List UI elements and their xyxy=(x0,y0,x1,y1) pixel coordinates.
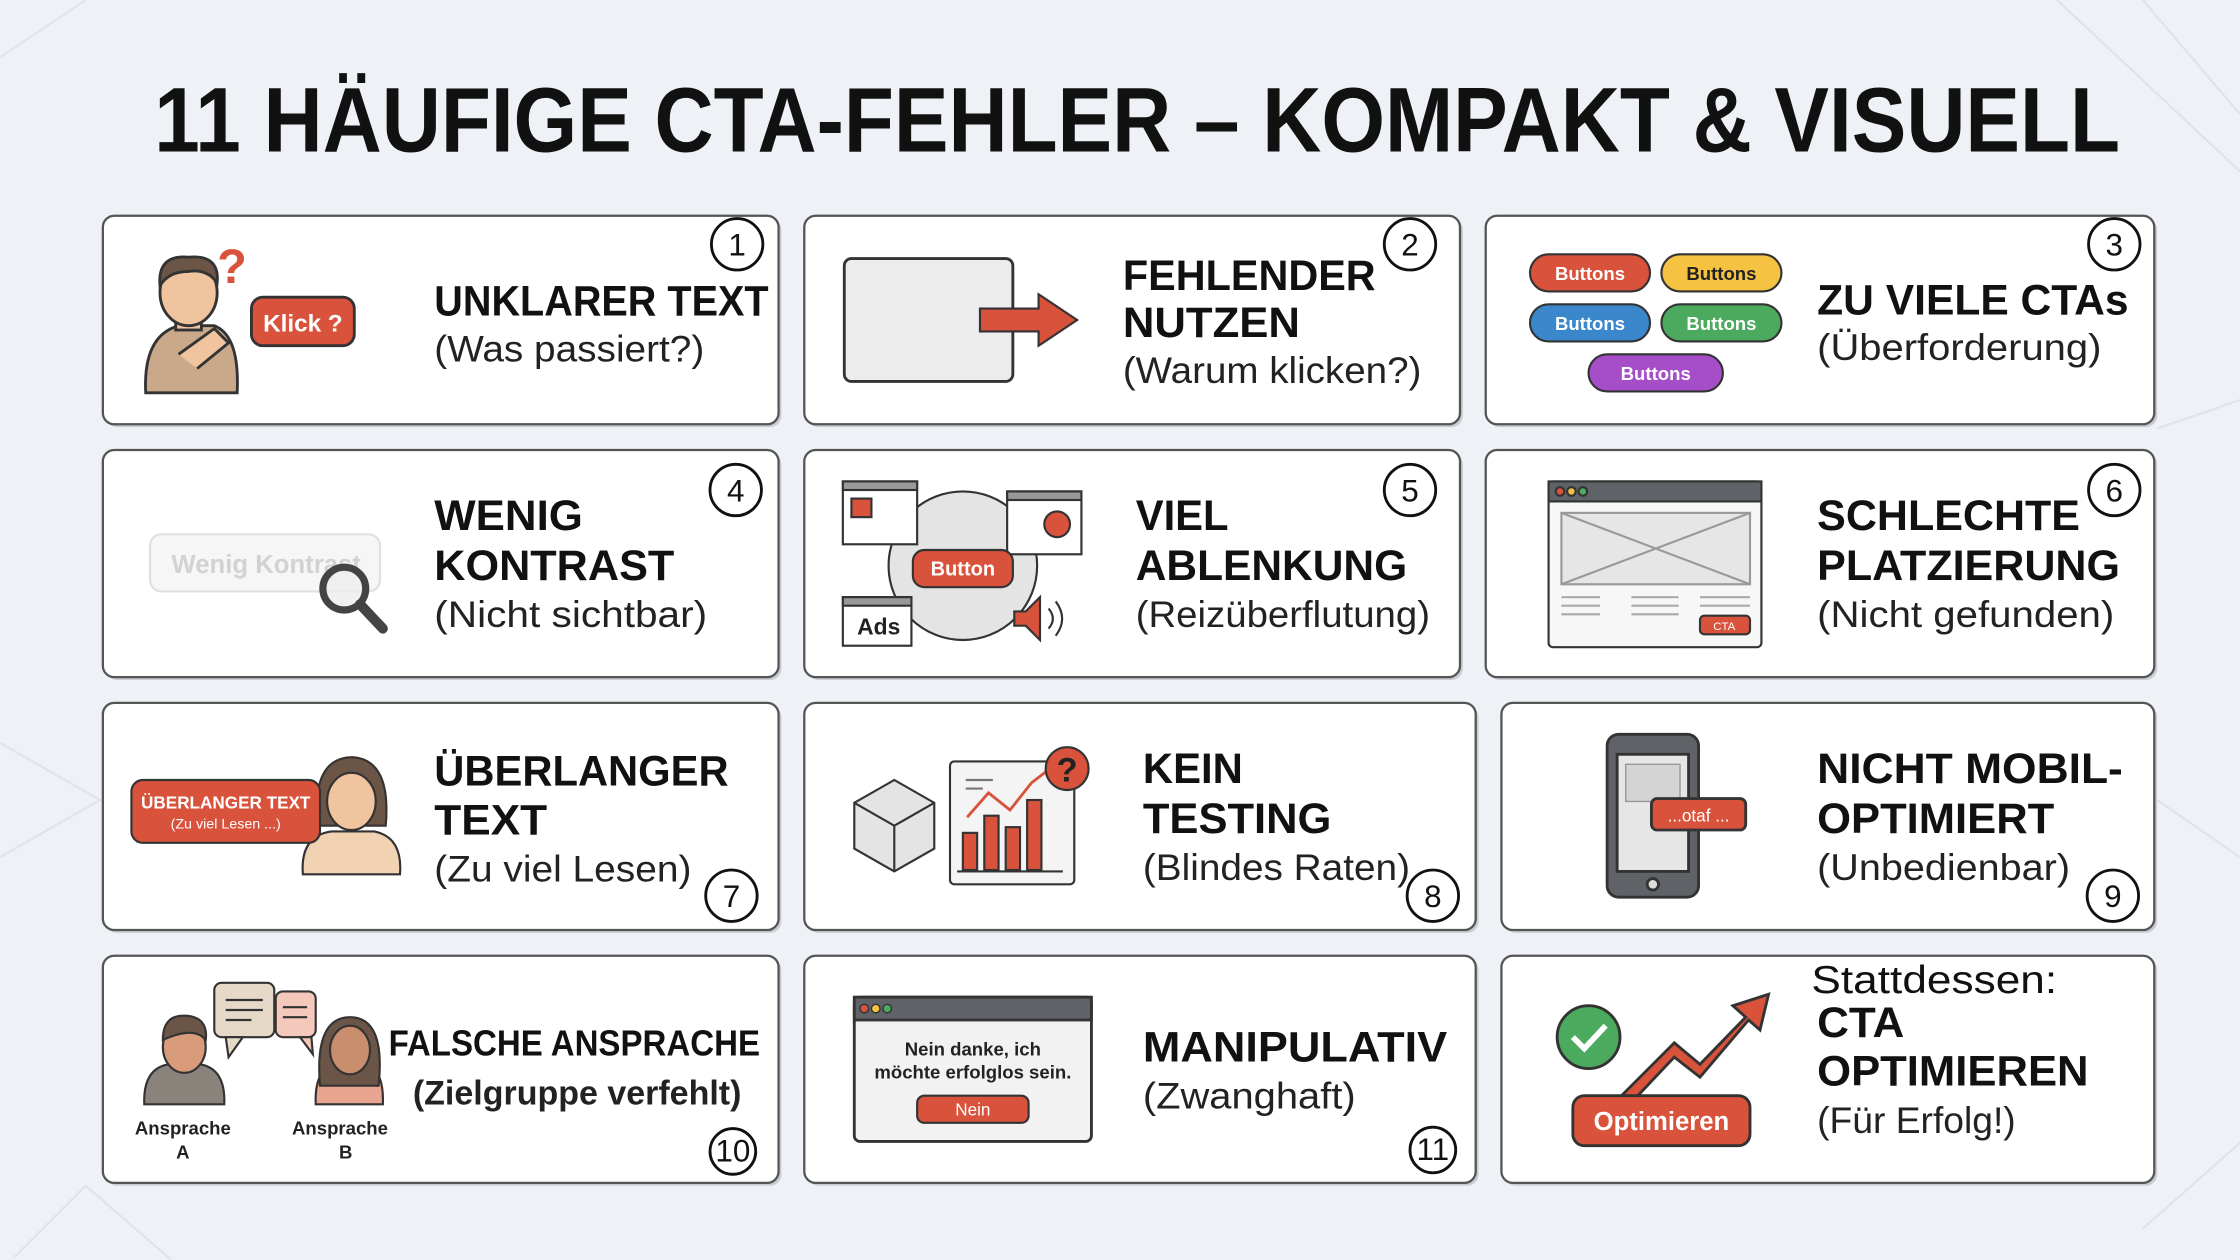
card 2: fehlender nutzen xyxy=(804,216,1463,427)
icon: phone xyxy=(1607,734,1746,897)
subtext: (Zielgruppe verfehlt) xyxy=(413,1074,741,1112)
card 7: ueberlanger text xyxy=(103,703,781,933)
heading: VIEL xyxy=(1136,492,1229,540)
icon: confused person: ? xyxy=(217,240,247,294)
number 5 xyxy=(1384,464,1436,516)
number 8 xyxy=(1407,870,1459,921)
icon: confirmshaming dialog: Nein danke, ich xyxy=(905,1039,1041,1060)
card 2: fehlender nutzen: NUTZEN xyxy=(1123,299,1300,347)
icon: long button and woman: ÜBERLANGER TEXT xyxy=(141,793,311,813)
number 11 xyxy=(1410,1127,1456,1173)
card 8: kein testing: TESTING xyxy=(1143,795,1331,843)
icon: confirmshaming dialog: möchte erfolglos sein. xyxy=(874,1062,1071,1083)
icon: distractions: Button xyxy=(931,559,995,581)
subtext: (Zwanghaft) xyxy=(1143,1075,1356,1117)
card 4: wenig kontrast: KONTRAST xyxy=(434,542,674,590)
card 7: ueberlanger text: TEXT xyxy=(434,796,547,844)
icon: dice and chart xyxy=(854,747,1089,884)
card 4: wenig kontrast xyxy=(103,450,781,680)
icon: faint button with magnifier: Wenig Kontrast xyxy=(171,551,361,579)
number 6 xyxy=(2089,464,2140,516)
icon: phone: ...otaf ... xyxy=(1668,805,1730,825)
number 2: 2 xyxy=(1401,228,1419,263)
icon: wireframe page xyxy=(1549,481,1761,647)
number 2 xyxy=(1384,219,1436,270)
heading: MANIPULATIV xyxy=(1143,1023,1448,1071)
number 6: 6 xyxy=(2106,473,2123,508)
subtext: (Blindes Raten) xyxy=(1143,846,1410,888)
icon: check, arrow, button: Optimieren xyxy=(1594,1108,1729,1136)
card 6: schlechte platzierung xyxy=(1486,450,2157,680)
icon: box with arrow xyxy=(844,259,1077,381)
icon: buttons: Buttons xyxy=(1686,313,1756,334)
icon: long button and woman: (Zu viel Lesen ...) xyxy=(171,817,281,833)
icon: check, arrow, button xyxy=(1557,994,1769,1146)
heading: UNKLARER TEXT xyxy=(434,278,769,326)
card 12: cta optimieren xyxy=(1501,956,2157,1186)
card 12: cta optimieren: OPTIMIEREN xyxy=(1817,1048,2089,1096)
subtext: (Für Erfolg!) xyxy=(1817,1099,2016,1141)
icon: dice and chart: ? xyxy=(1057,751,1078,789)
heading: CTA xyxy=(1817,999,1904,1047)
subtext: (Zu viel Lesen) xyxy=(434,847,691,889)
labels: ansprache a b: Ansprache xyxy=(292,1117,388,1138)
card 3: zu viele ctas xyxy=(1486,216,2157,427)
subtext: (Warum klicken?) xyxy=(1123,349,1421,391)
card 1: unklarer text xyxy=(103,216,781,427)
number 3 xyxy=(2089,219,2140,270)
number 1 xyxy=(711,219,763,270)
heading: SCHLECHTE xyxy=(1817,492,2080,540)
labels: ansprache a b: A xyxy=(176,1142,190,1163)
number 9: 9 xyxy=(2104,879,2122,914)
number 7: 7 xyxy=(723,879,740,914)
heading: NICHT MOBIL- xyxy=(1817,745,2123,793)
subtext: (Reizüberflutung) xyxy=(1136,593,1430,635)
number 8: 8 xyxy=(1424,879,1442,914)
card 5: viel ablenkung xyxy=(804,450,1463,680)
icon: buttons xyxy=(1530,254,1781,391)
icon: confused person xyxy=(146,240,247,393)
number 3: 3 xyxy=(2106,228,2123,263)
heading: FALSCHE ANSPRACHE xyxy=(389,1024,760,1064)
labels: ansprache a b xyxy=(135,1117,388,1163)
text: stattdessen: Stattdessen: xyxy=(1811,959,2057,1002)
card 10: falsche ansprache xyxy=(103,956,781,1186)
number 11: 11 xyxy=(1417,1132,1449,1167)
card 6: schlechte platzierung: PLATZIERUNG xyxy=(1817,542,2120,590)
subtext: (Überforderung) xyxy=(1817,326,2101,368)
heading: WENIG xyxy=(434,492,583,540)
heading: ÜBERLANGER xyxy=(434,748,729,796)
number 1: 1 xyxy=(728,228,746,263)
labels: ansprache a b: Ansprache xyxy=(135,1117,231,1138)
icon: distractions xyxy=(843,481,1081,646)
number 10 xyxy=(710,1129,756,1174)
number 7 xyxy=(706,870,757,921)
icon: confirmshaming dialog xyxy=(854,997,1091,1141)
icon: faint button with magnifier xyxy=(150,534,383,629)
subtext: (Nicht gefunden) xyxy=(1817,593,2114,635)
heading: ZU VIELE CTAs xyxy=(1817,276,2129,324)
card 11: manipulativ xyxy=(804,956,1479,1186)
icon: buttons: Buttons xyxy=(1686,263,1756,284)
icon: buttons: Buttons xyxy=(1555,313,1625,334)
card 9: nicht mobil-optimiert: OPTIMIERT xyxy=(1817,795,2054,843)
card 8: kein testing xyxy=(804,703,1479,933)
icon: buttons: Buttons xyxy=(1555,263,1625,284)
subtext: (Was passiert?) xyxy=(434,327,704,369)
card 9: nicht mobil-optimiert xyxy=(1501,703,2157,933)
icon: two people with speech bubbles xyxy=(144,983,383,1104)
number 9 xyxy=(2087,870,2139,921)
number 5: 5 xyxy=(1401,473,1419,508)
card 5: viel ablenkung: ABLENKUNG xyxy=(1136,542,1407,590)
icon: long button and woman xyxy=(131,757,400,874)
icon: distractions: Ads xyxy=(857,613,900,639)
button: klick xyxy=(251,297,354,346)
subtext: (Nicht sichtbar) xyxy=(434,593,707,635)
labels: ansprache a b: B xyxy=(339,1142,352,1163)
number 4: 4 xyxy=(727,473,744,508)
heading: FEHLENDER xyxy=(1123,252,1376,300)
number 4 xyxy=(710,464,761,516)
subtext: (Unbedienbar) xyxy=(1817,846,2070,888)
heading: KEIN xyxy=(1143,745,1243,793)
icon: confirmshaming dialog: Nein xyxy=(955,1100,990,1120)
icon: wireframe page: CTA xyxy=(1713,621,1736,633)
number 10: 10 xyxy=(715,1133,750,1168)
button: klick: Klick ? xyxy=(263,310,343,337)
icon: buttons: Buttons xyxy=(1621,363,1691,384)
